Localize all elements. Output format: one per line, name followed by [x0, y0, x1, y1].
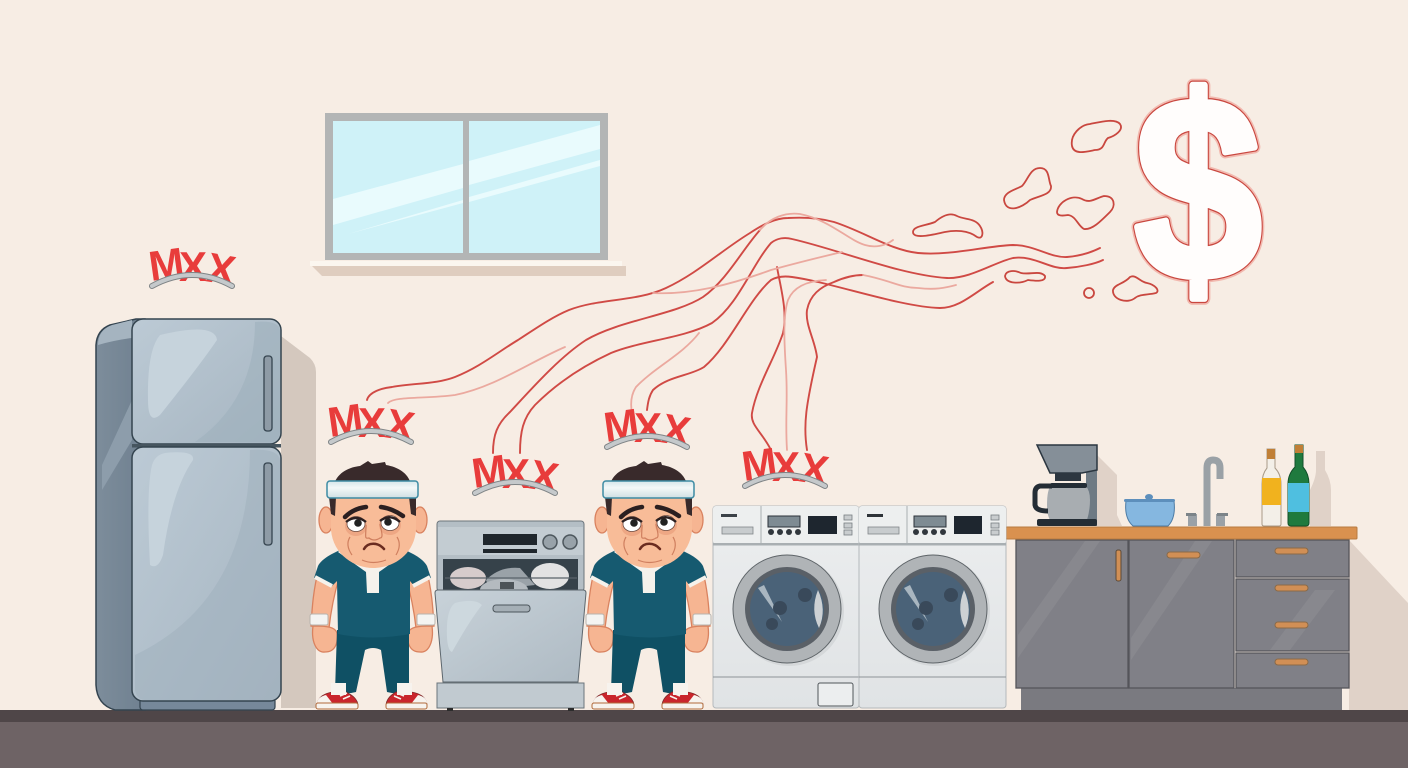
fridge lower door	[132, 447, 281, 701]
arc	[331, 431, 411, 442]
cabinet centre door	[1129, 540, 1234, 688]
right eye	[379, 515, 401, 535]
left washer filter hatch	[818, 683, 853, 706]
dishwasher control panel	[438, 527, 583, 555]
kitchen counter	[1006, 527, 1357, 710]
cooking pot	[1124, 494, 1175, 526]
MXX stress text: MXX	[146, 238, 239, 295]
nose and wrinkles	[624, 524, 675, 562]
dollar sign: $	[1134, 43, 1262, 335]
left washer	[713, 506, 859, 708]
right ear	[689, 507, 703, 533]
fridge upper door	[132, 319, 281, 444]
sideburns	[605, 497, 692, 516]
sleeve cuffs	[591, 577, 706, 586]
left eye	[621, 516, 643, 536]
MXX stress text: MXX	[469, 445, 562, 502]
faucet	[1186, 460, 1228, 526]
hair	[334, 461, 411, 484]
shirt	[314, 548, 431, 638]
trousers	[611, 630, 685, 694]
left arm	[311, 568, 339, 628]
left washer drum	[733, 555, 844, 666]
right shoe	[386, 683, 427, 709]
dark streams	[367, 218, 1103, 453]
headband	[603, 481, 694, 498]
floor	[0, 710, 1408, 768]
mouth	[640, 544, 660, 549]
arc	[745, 475, 825, 486]
right arm	[406, 568, 434, 628]
dishwasher interior with dishes	[443, 559, 578, 601]
right eye	[655, 515, 677, 535]
refrigerator	[96, 319, 281, 710]
dishwasher door	[435, 590, 586, 682]
right shoe	[662, 683, 703, 709]
face	[331, 495, 416, 568]
arc	[475, 482, 555, 493]
shirt	[590, 548, 707, 638]
arc	[607, 436, 687, 447]
person: right worker	[586, 461, 711, 709]
left shoe	[592, 683, 634, 709]
left shoe	[316, 683, 358, 709]
oil bottle	[1262, 449, 1281, 526]
sleeve cuffs	[315, 577, 430, 586]
left ear	[319, 507, 333, 533]
collar	[614, 548, 683, 593]
MXX stress text: MXX	[739, 438, 832, 495]
left ear	[595, 507, 609, 533]
dishwasher base	[437, 683, 584, 711]
right arm	[682, 568, 710, 628]
right washer control panel	[859, 506, 1006, 546]
MXX stress text: MXX	[325, 394, 418, 451]
top drawer	[1236, 540, 1349, 577]
eyebrows	[345, 507, 403, 517]
trousers	[335, 630, 409, 694]
left fist	[589, 626, 613, 652]
fridge shadow	[281, 336, 316, 708]
arc	[152, 275, 232, 286]
right washer drum	[879, 555, 990, 666]
stress mark over dishwasher	[469, 445, 562, 502]
headband	[327, 481, 418, 498]
right ear	[413, 507, 427, 533]
coffee maker	[1035, 445, 1122, 526]
left arm	[587, 568, 615, 628]
collar	[338, 548, 407, 593]
green bottle	[1288, 445, 1309, 526]
wristbands	[310, 614, 435, 625]
left eye	[345, 516, 367, 536]
plinth	[1021, 688, 1342, 710]
dishwasher body	[437, 521, 584, 591]
mouth	[364, 544, 384, 549]
stress mark over washer	[739, 438, 832, 495]
sideburns	[329, 497, 416, 516]
eyebrows	[621, 507, 679, 517]
red money-drain streams	[367, 214, 1103, 453]
dishwasher	[435, 521, 586, 711]
hair	[610, 461, 687, 484]
countertop	[1006, 527, 1357, 539]
right washer	[859, 506, 1006, 708]
dollar sign: $	[1134, 43, 1262, 335]
cabinet wall shadow	[1349, 540, 1408, 710]
person: left worker	[310, 461, 435, 709]
MXX stress text: MXX	[601, 399, 694, 456]
washing machines	[713, 506, 1006, 708]
middle drawer	[1236, 579, 1349, 651]
faded streams	[388, 214, 956, 450]
face	[607, 495, 692, 568]
red smoke puffs	[913, 121, 1158, 301]
stress mark over left worker	[325, 394, 418, 451]
bottom drawer	[1236, 653, 1349, 688]
fridge side panel	[96, 319, 145, 710]
dollar sign: $	[1134, 43, 1262, 335]
wristbands	[586, 614, 711, 625]
stress mark over fridge	[146, 238, 239, 295]
window	[310, 113, 626, 276]
cabinet left door	[1016, 540, 1128, 688]
left fist	[313, 626, 337, 652]
nose and wrinkles	[348, 524, 399, 562]
right fist	[684, 626, 708, 652]
stress mark over right worker	[601, 399, 694, 456]
right fist	[408, 626, 432, 652]
left washer control panel	[713, 506, 859, 546]
bottle shadow	[1310, 451, 1331, 526]
